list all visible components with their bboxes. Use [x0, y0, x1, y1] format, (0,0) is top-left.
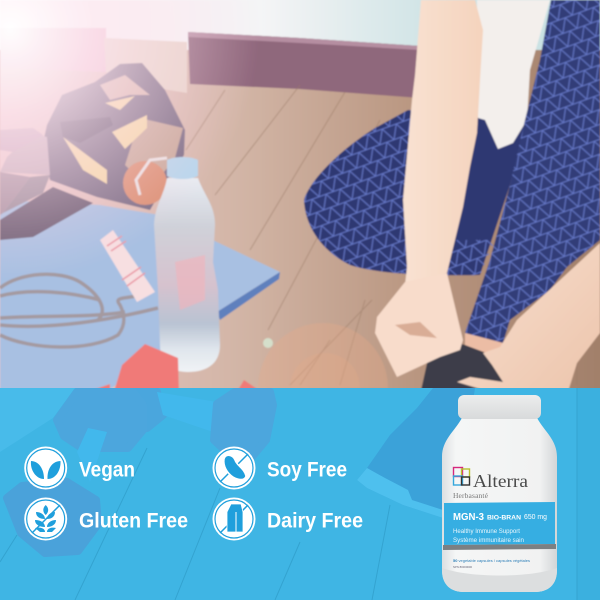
product bottle: BIO-BRAN: [487, 514, 521, 522]
bottle body: [442, 418, 557, 592]
logo mark: [454, 468, 470, 485]
label: Soy Free: Soy Free: [267, 458, 347, 482]
icon: gluten free wheat: [24, 498, 67, 540]
product claims: Healthy Immune Support: [453, 528, 520, 535]
mat tint: [0, 388, 75, 452]
dumbbell silhouette: [7, 392, 273, 553]
label: Vegan: Vegan: [79, 458, 135, 482]
product name: MGN-3: [453, 511, 484, 523]
capsule count: 50 vegetable capsules / capsules végétales: [453, 558, 530, 563]
floor planks: [0, 388, 577, 600]
brand name: Alterra: [473, 471, 528, 491]
product bottle: [442, 395, 557, 592]
label band: [444, 502, 555, 545]
icon: soy free: [212, 446, 256, 490]
product bottle: Système immunitaire sain: [453, 537, 524, 544]
product bottle: 650 mg: [524, 512, 547, 521]
shoe silhouette: [357, 388, 475, 518]
photo: workout scene: [0, 0, 600, 395]
blue band: [0, 388, 600, 600]
bottle cap: [458, 395, 541, 419]
label: Dairy Free: Dairy Free: [267, 510, 363, 532]
icon: dairy free carton: [212, 498, 256, 540]
npn number: NPN 80000000: [453, 565, 472, 569]
icon: vegan leaves: [24, 446, 67, 490]
label: Gluten Free: Gluten Free: [79, 510, 188, 532]
brand sub-name: Herbasanté: [453, 491, 489, 500]
